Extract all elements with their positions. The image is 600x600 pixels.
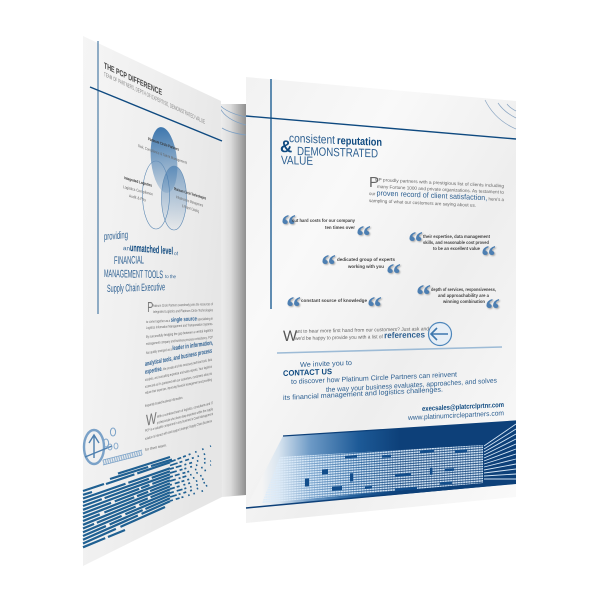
text block: team paragraph: professionals who share deep expertise within the supply: [157, 407, 213, 425]
quote: dedicated group: [321, 249, 401, 291]
text block: intro: [369, 174, 504, 208]
horizontal rule: [246, 116, 516, 139]
dark pixel patches: [305, 447, 467, 497]
heading: providing an unmatched level: FINANCIAL: [114, 254, 144, 267]
heading: consistent reputation and demonstrated value: consistent: [289, 131, 336, 147]
venn diagram: Risk, Compliance & Talent Management: [138, 143, 188, 165]
vertical rule: [270, 79, 272, 309]
venn diagram: Logistics Compliance: [123, 184, 154, 197]
quote: dedicated group: “: [386, 258, 401, 291]
venn diagram: [123, 126, 206, 230]
quote: expertise: skills, and reasonable cost proved: [423, 240, 489, 245]
vertical rule: [97, 41, 99, 314]
text block: references: we'd be happy to provide you with a list of references: [295, 329, 425, 342]
text block: references: ant to hear more first hand from our customers? Just ask and: [295, 326, 429, 335]
text block: about paragraph: Platinum Circle Partners seamlessly joins the resources of: [152, 302, 214, 308]
quote: expertise: “: [481, 240, 496, 273]
text block: intro: our proven record of client satisfaction, here's a: [369, 188, 504, 203]
text block: references: [283, 326, 429, 345]
heading: consistent reputation and demonstrated value: DEMONSTRATED: [297, 144, 378, 160]
text block: about paragraph: Logistics Information Management and Transportation Systems.: [146, 322, 213, 330]
text block: about paragraph: frequently trusted business information.: [145, 396, 183, 408]
quote: dedicated group: dedicated group of experts: [337, 257, 395, 262]
venn diagram: & Report Catalog: [182, 203, 199, 214]
horizontal rule: [90, 87, 222, 141]
text block: contact: www.platinumcirclepartners.com: [407, 410, 504, 422]
text block: about paragraph: expertise. We provide all of the necessary technical tools, data: [145, 356, 213, 376]
text block: team paragraph: solution to interact with and support strategic Supply Chain Business: [145, 419, 212, 441]
heading: providing an unmatched level: unmatched level: [130, 242, 173, 257]
venn diagram: Audit & Pay: [129, 193, 147, 202]
quote: cut hard costs: ten times over: [325, 225, 355, 230]
heading: providing an unmatched level: to the: [165, 274, 176, 280]
heading: providing an unmatched level: an: [123, 246, 130, 253]
heading: consistent reputation and demonstrated value: reputation: [337, 135, 382, 149]
quote: constant source: constant source of knowledge: [301, 298, 367, 303]
venn diagram: Integrated Logistics: [124, 175, 153, 188]
quote: expertise: [408, 226, 496, 273]
text block: intro: P: [369, 174, 379, 191]
venn diagram: Infrastructure Management: [176, 194, 203, 208]
text block: about paragraph: [145, 299, 214, 408]
icon: left arrow circle: [428, 322, 452, 346]
graphic: blue footer band: [246, 421, 516, 508]
decorative arcs: [485, 100, 516, 129]
heading: providing an unmatched level: Supply Chain Executive: [107, 281, 165, 295]
quote: cut hard costs: “: [281, 209, 296, 242]
quote: dedicated group: “: [321, 249, 336, 282]
quote: depth of services: winning combination: [442, 299, 485, 304]
text block: intro: many Fortune 1000 and private organizations. As testament to: [377, 184, 504, 195]
text block: about paragraph: Integrated Logistics and Platinum Circle Technologies: [153, 308, 213, 314]
text block: about paragraph: scorecard as it's partnered with our customers, customers about to: [145, 372, 212, 389]
venn diagram: Platinum Circle Partners: [148, 136, 179, 152]
text block: team paragraph: W: [146, 408, 157, 429]
text block: contact: to discover how Platinum Circle Partners can reinvent: [291, 372, 457, 386]
text block: about paragraph: has quickly emerged as a leader in information,: [146, 340, 213, 356]
text block: team paragraph: for their team.: [145, 443, 167, 452]
text block: team paragraph: [145, 401, 214, 452]
text block: about paragraph: P: [147, 299, 153, 316]
quote: expertise: to be an excellent value: [433, 246, 480, 251]
quote: expertise: their expertise, data management: [423, 234, 490, 239]
heading: consistent reputation and demonstrated value: &: [280, 137, 292, 156]
text block: references: W: [283, 328, 298, 345]
heading: providing an unmatched level: [104, 229, 179, 295]
panel: left inside page: [83, 36, 222, 566]
quote: dedicated group: working with you: [347, 264, 384, 269]
icon: upward arrow emblem: [84, 428, 142, 465]
text block: about paragraph: analysis, and consulting expertise and sales reports. Your logistics: [145, 365, 212, 382]
quote: expertise: “: [408, 226, 423, 259]
panel: left inside page: TEAM OF PARTNERS, DEPTH OF EXPERTISE, DEMONSTRATED VALUE: [104, 71, 205, 126]
panel: right page: [246, 77, 516, 523]
quote: depth of services: “: [416, 279, 431, 312]
text block: about paragraph: reduce their expenses, improving financial management and providing: [145, 378, 212, 395]
heading: providing an unmatched level: providing: [104, 229, 128, 243]
text block: intro: CP proudly partners with a prestigious list of clients including: [375, 177, 504, 188]
text block: about paragraph: to come together as a single source specializing in: [146, 316, 213, 325]
quote: depth of services: depth of services, responsiveness,: [431, 287, 496, 292]
quote: constant source: “: [367, 291, 382, 324]
divider line: [277, 347, 502, 353]
heading: providing an unmatched level: of: [174, 251, 179, 257]
quote: cut hard costs: cut hard costs for our company: [292, 218, 355, 223]
text block: about paragraph: management company and business process consultancy, PCP: [146, 335, 213, 346]
text block: team paragraph: With a combined team of logistics, consultants and IT: [157, 401, 213, 419]
text block: about paragraph: analytical tools, and business process: [145, 348, 212, 368]
text block: about paragraph: By successfully bridging the gap between a central logistics: [146, 328, 213, 339]
text block: contact: CONTACT US: [283, 367, 333, 378]
quote: constant source: [286, 291, 382, 324]
quote: depth of services: and approachability are a: [438, 293, 489, 298]
quote: depth of services: [416, 279, 500, 326]
text block: contact: its financial management and logistics challenges.: [283, 387, 443, 402]
heading: providing an unmatched level: MANAGEMENT TOOLS: [104, 268, 163, 281]
stripes dissolving to dots: [170, 446, 211, 501]
graphic: digital stripes: [83, 446, 211, 547]
text block: team paragraph: PCP is a valuable component in any business's Cash Management: [145, 412, 214, 433]
quote: cut hard costs: “: [356, 220, 371, 253]
venn diagram: Platinum Circle Technologies: [174, 186, 206, 201]
text block: contact: [283, 360, 504, 422]
perspective stripes: [484, 424, 516, 479]
text block: contact: We invite you to: [300, 360, 352, 369]
heading: consistent reputation and demonstrated value: [280, 131, 382, 168]
text block: contact: execsales@platcrclprtnr.com: [422, 402, 504, 413]
quote: depth of services: “: [485, 293, 500, 326]
text block: contact: the way your business evaluates, approaches, and solves: [326, 378, 497, 394]
quote: constant source: “: [286, 291, 301, 324]
heading: consistent reputation and demonstrated value: VALUE: [281, 153, 313, 168]
middle fold panel: [216, 100, 246, 497]
text block: intro: sampling of what our customers are saying about us.: [369, 198, 476, 208]
heading: the pcp difference: THE PCP DIFFERENCE: [104, 60, 162, 97]
quote: cut hard costs: [281, 209, 371, 253]
